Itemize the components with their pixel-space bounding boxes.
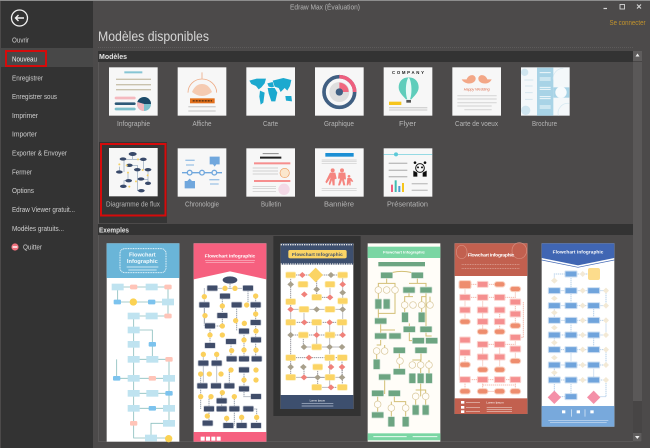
template: presentation: Présentation xyxy=(387,200,428,208)
example 2: pink flowchart xyxy=(194,243,266,442)
example 1: blue flowchart xyxy=(107,243,179,442)
example 1: blue flowchart: Infographic xyxy=(127,259,158,265)
template: chronologie: Chronologie xyxy=(185,200,219,208)
template: carte de voeux xyxy=(452,67,501,128)
template: flyer: Flyer xyxy=(399,119,417,128)
window title: Edraw Max (Évaluation) xyxy=(290,2,360,12)
example 3: selected dark and yellow flowchart xyxy=(273,236,361,416)
template: diagramme de flux (selected): Diagramme de flux xyxy=(106,200,160,208)
template: flyer: COMPANY xyxy=(392,70,424,75)
menu: enregistrer sous: Enregistrer sous xyxy=(12,92,57,101)
template: carte: Carte xyxy=(263,119,278,128)
example 4: green flowchart: Flowchart Infographic xyxy=(383,250,426,255)
panda xyxy=(412,161,428,190)
menu: exporter et envoyer: Exporter & Envoyer xyxy=(12,148,67,158)
menu: nouveau: Nouveau xyxy=(12,54,37,64)
menu: importer: Importer xyxy=(12,130,37,138)
sidebar xyxy=(1,1,93,448)
menu: ouvrir: Ouvrir xyxy=(12,36,29,44)
template: banniere: Bannière xyxy=(324,200,354,208)
template: infographie: Infographie xyxy=(117,119,150,128)
template: infographie xyxy=(109,67,158,128)
template: graphique: Graphique xyxy=(324,119,354,128)
menu: quitter: Quitter xyxy=(23,242,42,252)
example 6: blue flowchart: Flowchart Infographic xyxy=(553,250,604,255)
red highlight on nouveau xyxy=(6,51,46,66)
example 6: blue flowchart xyxy=(542,243,614,427)
example 5: red flowchart xyxy=(455,243,527,414)
section bar: exemples: Exemples xyxy=(99,226,129,234)
template: bulletin xyxy=(246,148,295,208)
icon: quit xyxy=(11,243,19,251)
scrollbar xyxy=(633,51,642,442)
template: brochure xyxy=(521,67,570,128)
red selection frame xyxy=(101,144,166,216)
example 2: pink flowchart: Flowchart Infographic xyxy=(205,253,256,259)
template: presentation xyxy=(384,148,432,208)
template: diagramme de flux (selected) xyxy=(106,148,160,208)
template: brochure: Brochure xyxy=(532,119,557,128)
menu: modeles gratuits: Modèles gratuits... xyxy=(12,224,64,233)
template: flyer xyxy=(384,67,432,128)
page heading: Modèles disponibles xyxy=(98,28,209,44)
template: carte de voeux: Carte de voeux xyxy=(455,119,498,128)
selected template background xyxy=(99,142,167,223)
template: carte xyxy=(246,67,295,128)
section bar: exemples xyxy=(98,224,633,235)
template: banniere xyxy=(315,148,364,208)
template: carte de voeux: Happy Wedding xyxy=(464,88,490,92)
example 5: red flowchart: Flowchart Infographic xyxy=(468,253,515,259)
example 1: blue flowchart: Flowchart xyxy=(129,253,156,259)
template: chronologie xyxy=(178,148,226,208)
menu: edraw viewer: Edraw Viewer gratuit... xyxy=(12,205,75,214)
example 3: selected dark and yellow flowchart: Lorem Ipsum xyxy=(310,398,326,402)
template: graphique xyxy=(315,67,364,128)
example 3: selected dark and yellow flowchart: Flowchart Infographic xyxy=(292,252,343,257)
section bar: modeles: Modèles xyxy=(99,52,127,61)
example 5: red flowchart: Lorem Ipsum xyxy=(486,401,504,405)
example 4: green flowchart xyxy=(368,243,440,442)
template: affiche xyxy=(178,67,226,128)
menu: imprimer: Imprimer xyxy=(12,111,38,120)
nouveau highlight xyxy=(1,48,93,67)
window controls xyxy=(604,4,641,9)
template: bulletin: Bulletin xyxy=(261,200,281,208)
menu: fermer: Fermer xyxy=(12,168,32,176)
menu: options: Options xyxy=(12,186,34,195)
template: affiche: Affiche xyxy=(192,119,212,128)
section bar: modeles xyxy=(98,51,633,62)
icon: back arrow xyxy=(12,10,28,26)
menu: enregistrer: Enregistrer xyxy=(12,74,43,82)
